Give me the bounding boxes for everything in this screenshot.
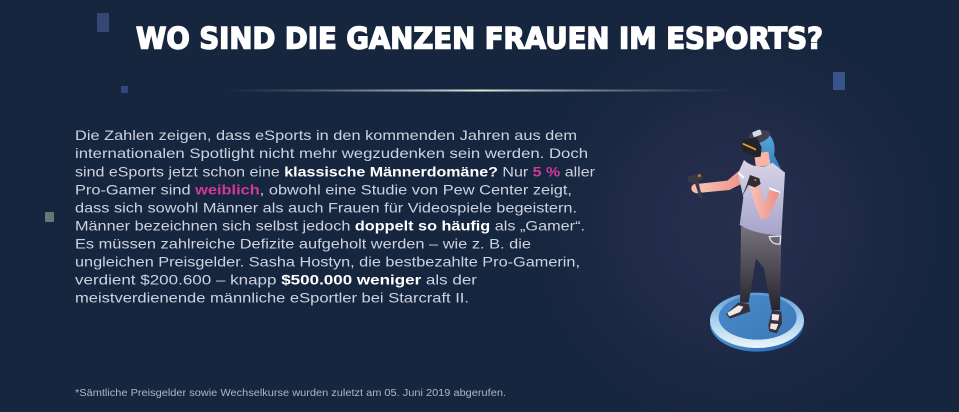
body text: dass sich sowohl Männer als auch Frauen für Videospiele begeistern.	[75, 200, 577, 216]
body text: ungleichen Preisgelder. Sasha Hostyn, die bestbezahlte Pro-Gamerin,	[75, 255, 580, 270]
body text: internationalen Spotlight nicht mehr wegzudenken sein werden. Doch	[75, 146, 588, 161]
body text: Die Zahlen zeigen, dass eSports in den kommenden Jahren aus dem	[75, 128, 577, 143]
illustration: woman with VR headset on platform	[687, 129, 804, 352]
floating cube: top right	[833, 72, 845, 90]
body text: sind eSports jetzt schon eine klassische Männerdomäne? Nur 5 % aller	[75, 164, 595, 179]
sleeve trims	[738, 173, 780, 193]
headset	[742, 129, 770, 157]
body text: verdient $200.600 – knapp $500.000 weniger als der	[75, 273, 477, 288]
controller right	[742, 175, 761, 197]
bent arm	[749, 181, 779, 219]
shirt	[738, 160, 785, 235]
body text	[75, 128, 595, 306]
back hair	[757, 130, 781, 168]
body text: meistverdienende männliche eSportler bei Starcraft II.	[75, 291, 469, 306]
right shoe	[768, 311, 782, 333]
hand left	[691, 183, 703, 193]
neck	[754, 152, 771, 167]
divider line	[225, 90, 735, 92]
floating cube: left grey green	[45, 212, 54, 222]
floating cube: top left	[97, 13, 109, 32]
extended arm	[697, 169, 746, 193]
controller left	[687, 173, 703, 199]
platform	[710, 293, 804, 352]
body text: Pro-Gamer sind weiblich , obwohl eine Studie von Pew Center zeigt,	[75, 182, 572, 197]
floating cube: small blue	[121, 86, 128, 93]
body text: Es müssen zahlreiche Defizite aufgeholt werden – wie z. B. die	[75, 237, 531, 252]
legs	[740, 227, 781, 311]
footnote: *Sämtliche Preisgelder sowie Wechselkurse wurden zuletzt am 05. Juni 2019 abgerufen.	[75, 388, 506, 399]
body text: Männer bezeichnen sich selbst jedoch doppelt so häufig als „Gamer“.	[75, 218, 585, 234]
left shoe	[726, 302, 750, 319]
title: WO SIND DIE GANZEN FRAUEN IM ESPORTS?	[136, 22, 823, 56]
